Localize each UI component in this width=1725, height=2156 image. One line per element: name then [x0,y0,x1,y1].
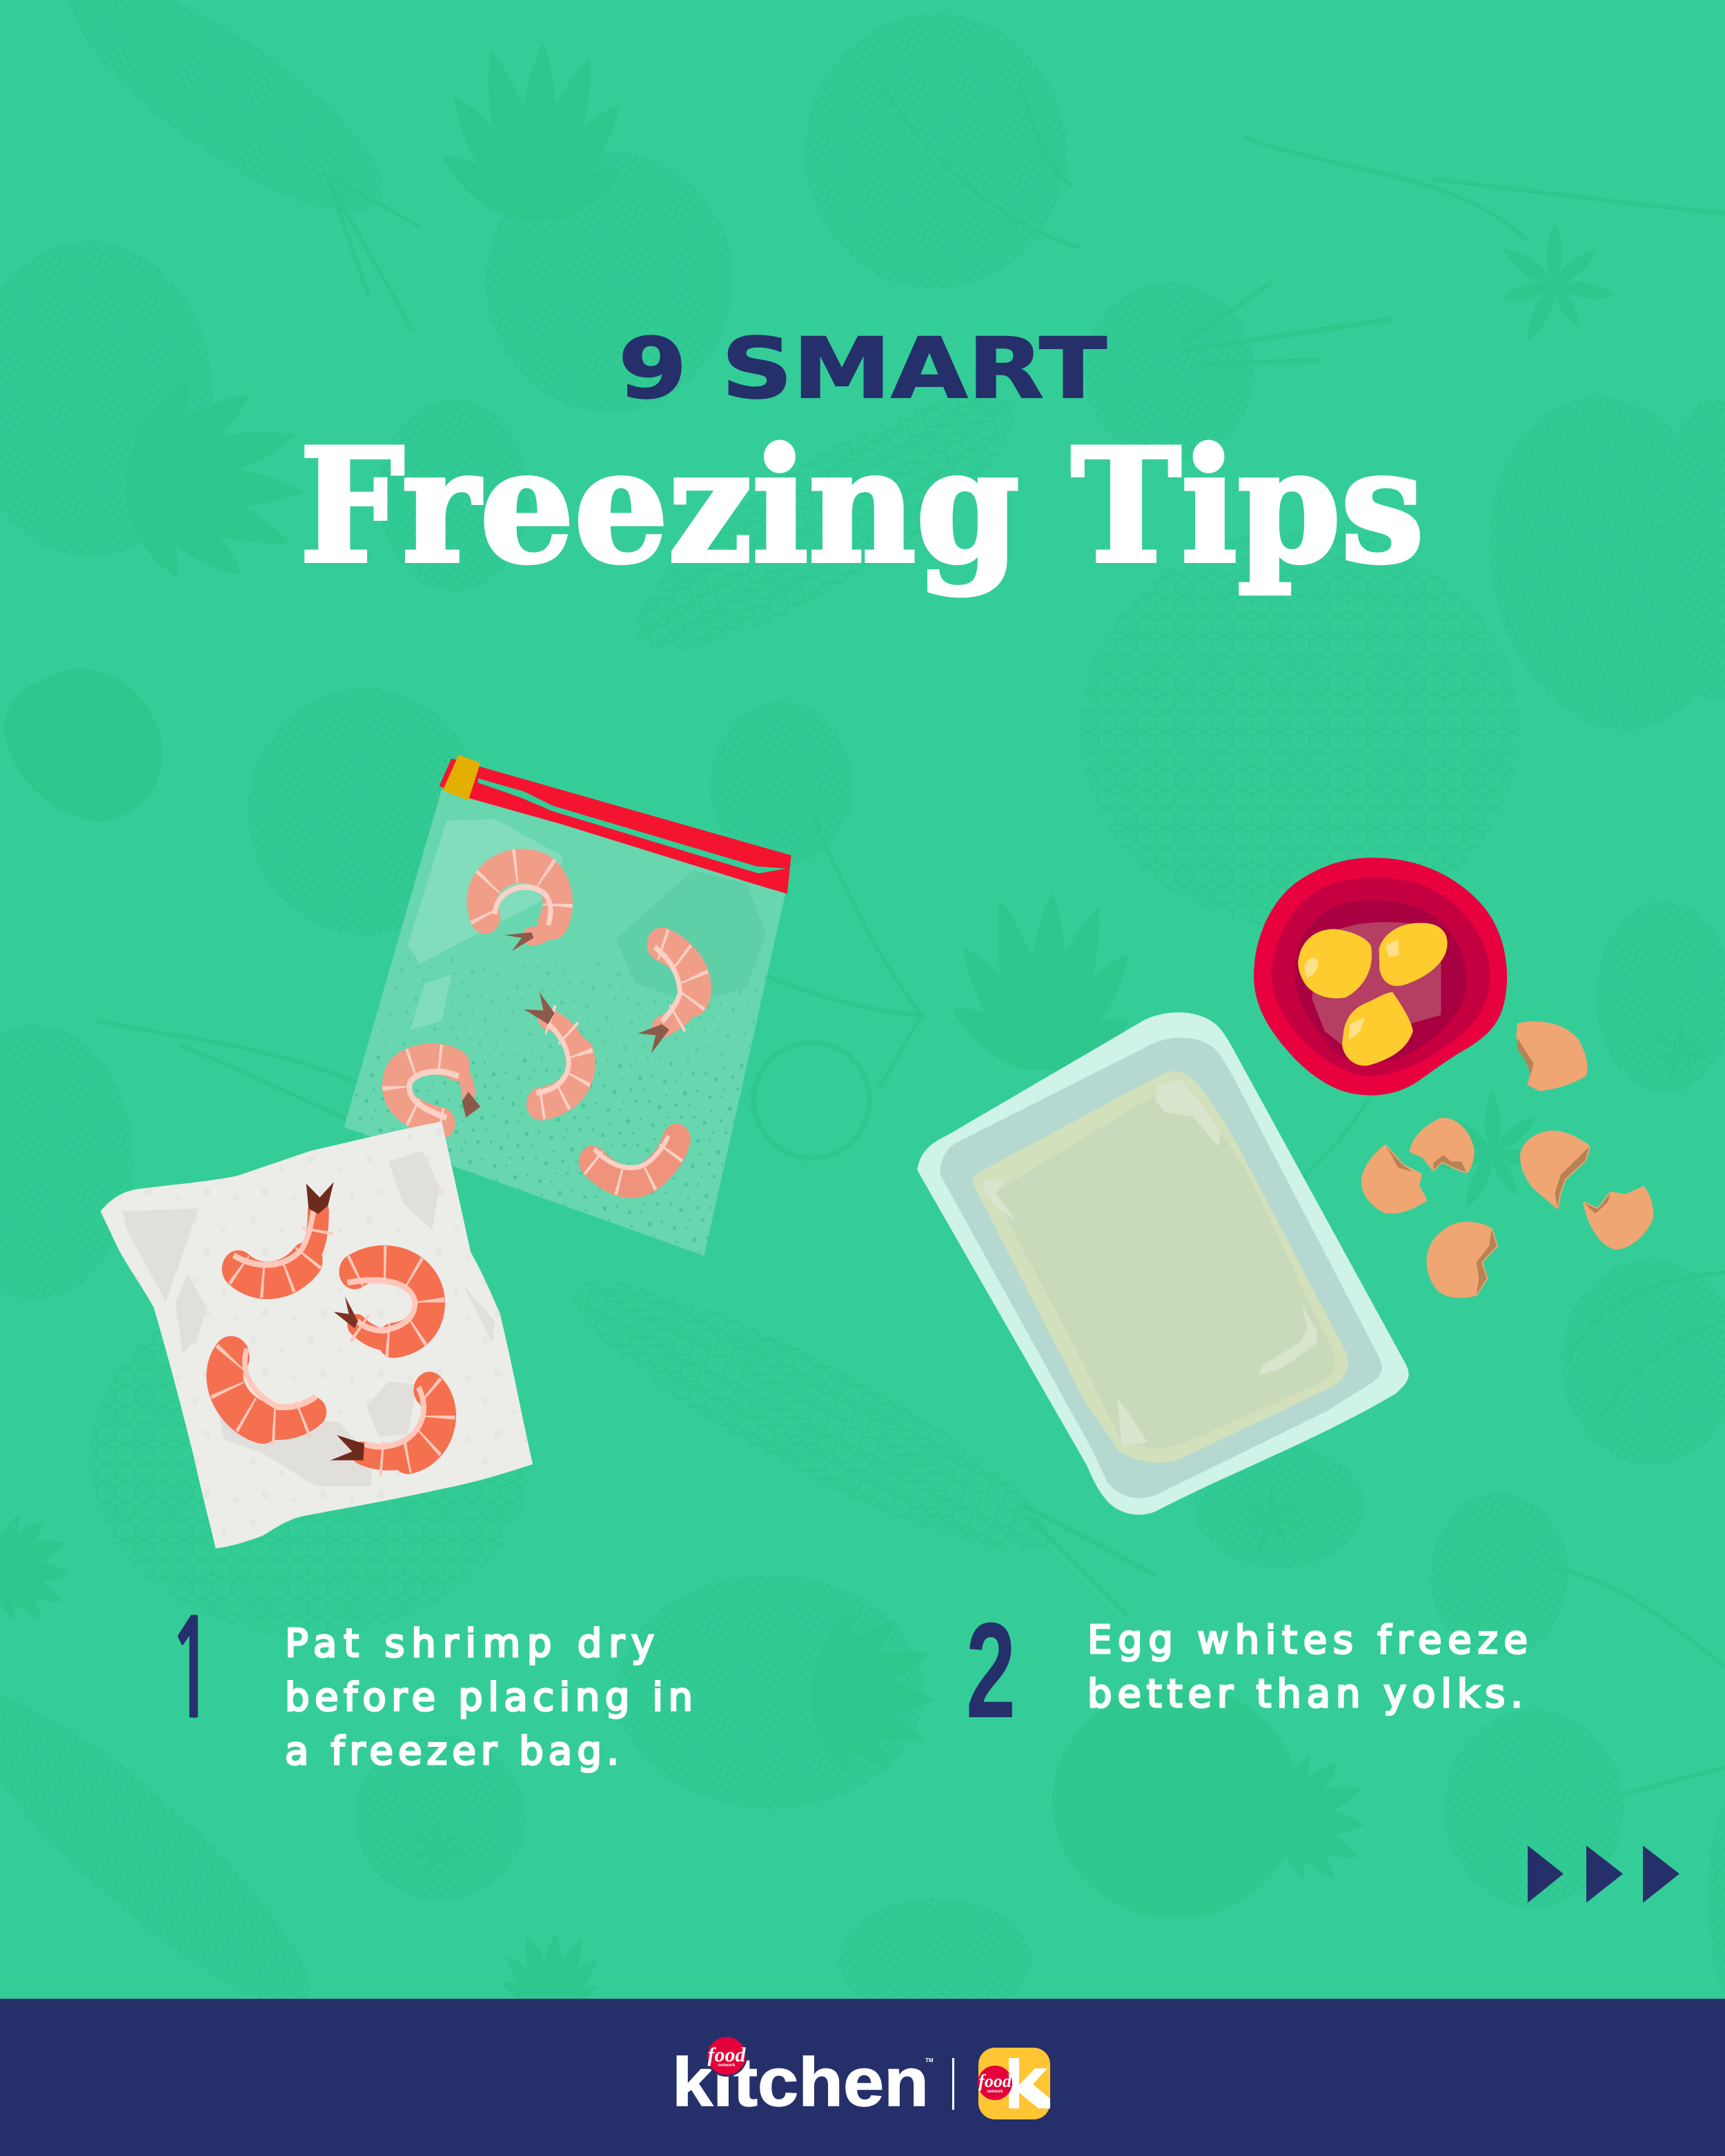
tip 1 text: before placing in [285,1675,693,1720]
shrimp in bag: upper right [638,945,696,1054]
zipper slider [443,755,480,800]
tip 1 number: 1 [168,1604,216,1738]
egg shells [1363,1022,1652,1297]
tip 1 text [285,1621,693,1774]
shrimp in bag: lower right [593,1136,676,1182]
logo: Food Network Kitchen [672,2035,1050,2120]
heading: Freezing Tips: Freezing Tips [299,414,1424,598]
shrimp on towel: right [334,1263,430,1341]
egg shell inner edges [1386,1038,1610,1294]
shrimp in bag: lower left [395,1059,480,1123]
freezer tray [917,1012,1409,1515]
divider [952,2058,954,2110]
footer band [0,1999,1725,2156]
tip 2 number: 2 [966,1594,1016,1746]
trademark: TM [925,2057,934,2064]
app icon: food [978,2071,1012,2091]
app icon [978,2048,1050,2119]
shrimp in bag: upper left [482,866,558,951]
wordmark kitchen: kitchen [672,2044,929,2120]
tip 1 text: Pat shrimp dry [285,1621,654,1666]
next arrows [1528,1846,1679,1903]
red badge [706,2035,747,2077]
tip 2 text [1087,1618,1528,1717]
red badge: network [718,2063,736,2068]
zipper seal [440,758,791,894]
shrimp in bag: centre [524,992,581,1104]
illustration: shrimp in freezer bag on paper towel [101,755,791,1548]
paper towel [101,1122,533,1548]
egg yolks [1299,924,1446,1065]
heading: 9 SMART: 9 SMART [618,320,1107,417]
tip 2 text: better than yolks. [1087,1672,1523,1717]
app icon: network [987,2090,1003,2094]
freezer bag [344,789,787,1256]
tip 2 text: Egg whites freeze [1087,1618,1528,1663]
shrimp on towel: top [234,1182,334,1280]
red badge: food [708,2044,746,2066]
red bowl [1254,858,1507,1096]
tip 1 text: a freezer bag. [285,1729,619,1774]
shrimp on towel: lower left [225,1349,316,1425]
shrimp on towel: lower right [331,1387,440,1461]
illustration: egg whites in tray, yolks in bowl, egg shells [917,858,1652,1515]
